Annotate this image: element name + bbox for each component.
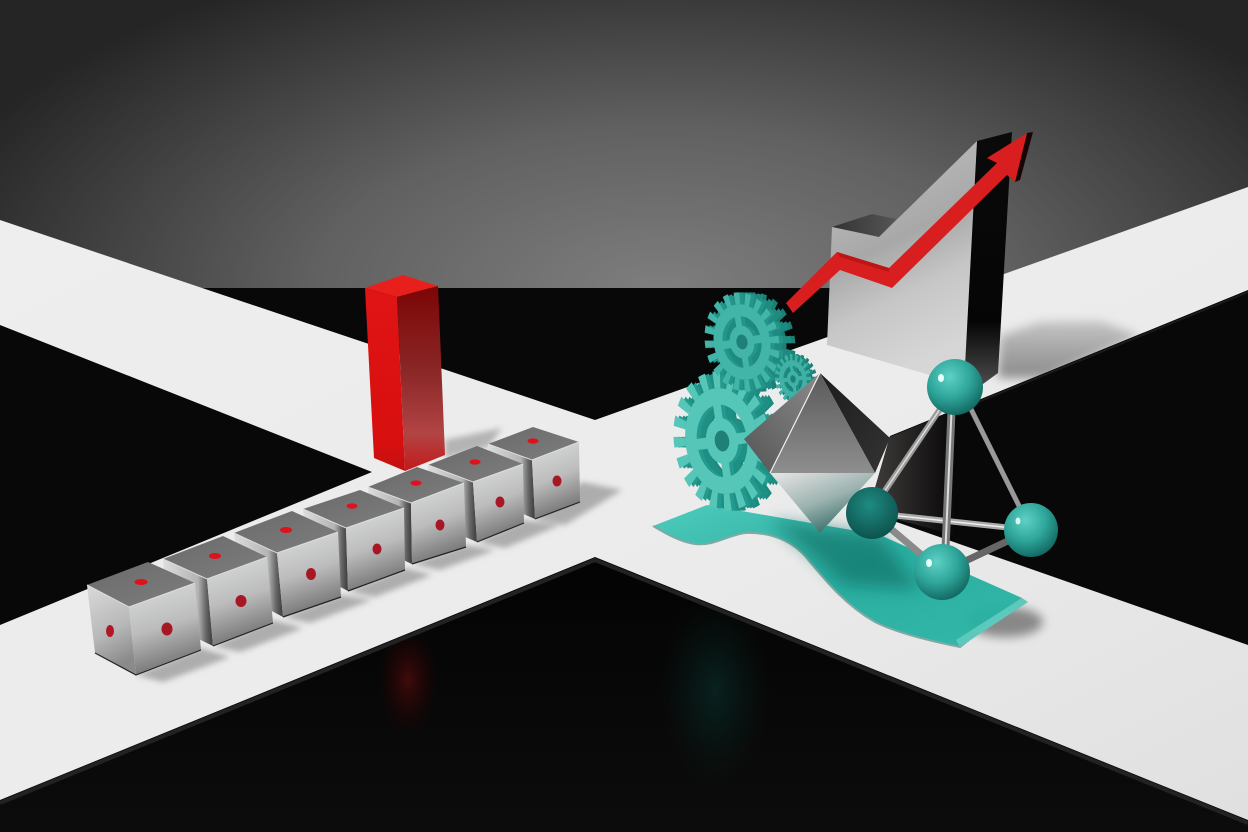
chart block with red growth arrow xyxy=(786,132,1033,385)
translucent teal wave sheet xyxy=(653,505,1028,647)
black floor xyxy=(0,288,1248,832)
cube 4 xyxy=(303,490,405,591)
upward arrow xyxy=(786,132,1033,313)
cube 2 xyxy=(163,536,273,646)
red bar xyxy=(365,275,445,471)
block shadow xyxy=(998,321,1140,378)
block side xyxy=(962,132,1012,385)
bar shadow xyxy=(445,428,502,458)
sphere: top xyxy=(927,359,983,415)
cube 5 xyxy=(368,467,466,564)
gear: upper xyxy=(702,293,798,391)
row of silver cubes with red dots xyxy=(87,427,580,675)
white cross-shaped road xyxy=(0,187,1248,823)
floor shadows xyxy=(136,321,1140,682)
silver octahedron xyxy=(744,373,890,533)
gear: small xyxy=(774,355,818,403)
sphere: bottom xyxy=(914,544,970,600)
cube 6 xyxy=(428,446,524,542)
sphere: left xyxy=(846,487,898,539)
dark prism behind molecule xyxy=(868,410,955,535)
rods xyxy=(872,387,1031,572)
sphere: right xyxy=(1004,503,1058,557)
cube 1 xyxy=(87,562,201,675)
cube 7 xyxy=(488,427,580,519)
molecule model xyxy=(846,359,1058,600)
gear: large lower xyxy=(672,374,786,508)
block top xyxy=(832,214,896,237)
cube shadows xyxy=(136,482,622,682)
block front xyxy=(827,141,977,385)
grey back wall xyxy=(0,0,1248,288)
lower black panel with reflections xyxy=(0,557,1248,832)
sheet shadow xyxy=(967,607,1043,637)
cube 3 xyxy=(234,511,341,617)
